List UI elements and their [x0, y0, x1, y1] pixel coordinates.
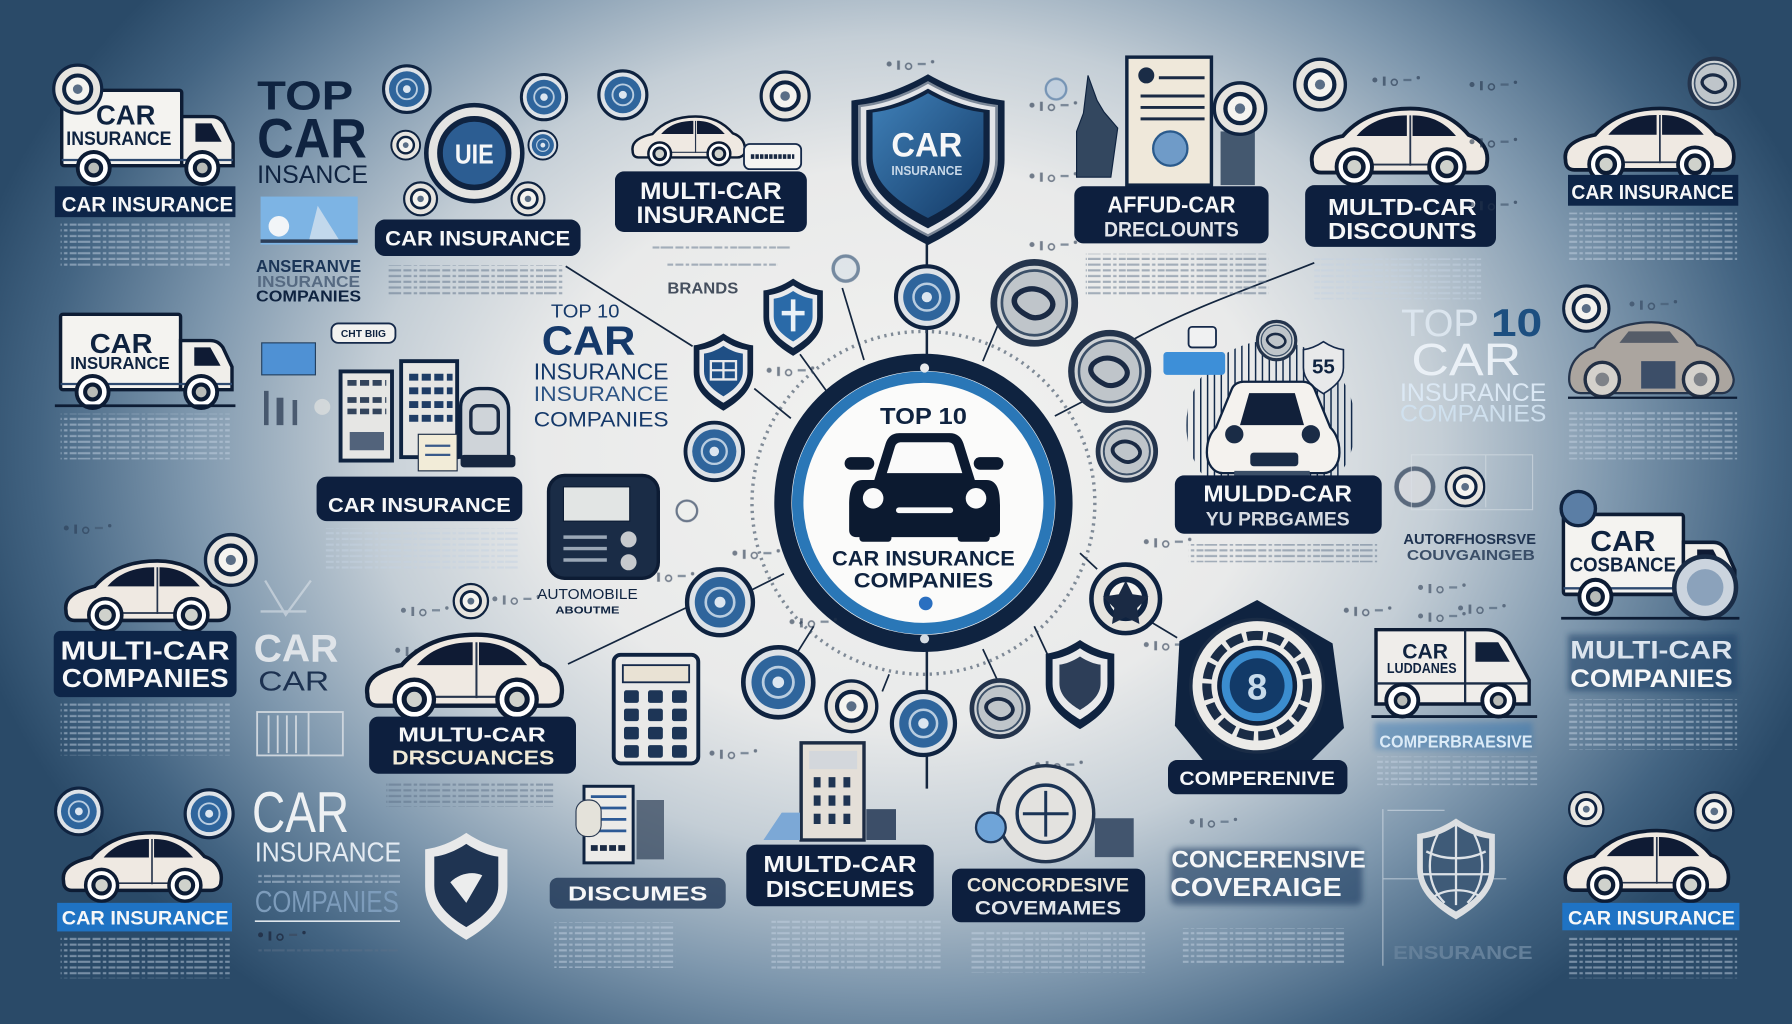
label: MULTD-CAR — [1328, 194, 1477, 220]
icon: sedan — [66, 561, 229, 632]
heading: top car insance — [257, 73, 368, 189]
panel: bottom-right car — [1562, 792, 1739, 978]
label — [1568, 634, 1737, 693]
icon: dark blue badge — [685, 423, 743, 480]
icon: main hub: UIE — [455, 138, 494, 169]
label: MULDD-CAR — [1203, 481, 1353, 507]
heading: top 10 right: 10 — [1491, 302, 1542, 345]
truck text — [1570, 526, 1676, 576]
label — [1305, 185, 1496, 247]
label — [1168, 760, 1347, 794]
small pill — [331, 323, 395, 343]
icon: badge — [1257, 321, 1296, 360]
icon: small marks — [264, 391, 330, 425]
truck text: CAR — [90, 328, 153, 359]
ground line — [1568, 397, 1737, 399]
heading: top 10 left — [534, 301, 669, 431]
heading: top 10 left: COMPANIES — [534, 406, 669, 431]
text block — [971, 931, 1145, 973]
panel: multi-car discumes — [746, 743, 941, 970]
text block — [554, 922, 675, 968]
label — [1175, 475, 1382, 534]
truck text: INSURANCE — [66, 128, 171, 150]
truck text — [66, 100, 171, 150]
label: DRSCUANCES — [392, 747, 554, 770]
small tag — [744, 144, 801, 169]
text block — [651, 245, 791, 298]
heading: top 10 right — [1400, 302, 1546, 428]
icon: blue hub circle — [896, 266, 958, 328]
icon: plant — [1077, 75, 1118, 177]
icon: badge — [454, 584, 488, 618]
icon: badge — [54, 65, 102, 113]
heading: car insurance companies — [832, 546, 1015, 592]
icon: document right — [401, 361, 457, 471]
label — [746, 845, 934, 906]
icon: badge — [1214, 83, 1266, 185]
panel: multi-car discounts — [1295, 59, 1517, 299]
label: MULTI-CAR — [640, 178, 782, 205]
panel: concordesive — [952, 766, 1145, 973]
icon: badges — [599, 71, 809, 120]
icon: top shield — [851, 74, 1005, 245]
text block — [1568, 411, 1737, 459]
van text: CAR — [1402, 638, 1448, 663]
text block — [61, 221, 230, 266]
panel: left multi-car — [54, 524, 256, 755]
icon: badge — [1295, 59, 1345, 110]
label — [1170, 846, 1366, 905]
label: COMPERBRAESIVE — [1379, 731, 1533, 751]
icon: blue-gray cart badge — [743, 647, 813, 717]
icon: blue swirl badge — [687, 569, 753, 635]
text block — [326, 528, 520, 571]
subheading: comprehensive coverage — [1403, 532, 1536, 564]
text block — [1568, 937, 1737, 978]
icon: shield lower right — [1046, 640, 1114, 729]
banner: MULTI-CAR — [61, 635, 230, 665]
icon: car front — [845, 433, 1003, 542]
icon: delivery truck — [61, 314, 232, 408]
truck text: COSBANCE — [1570, 553, 1676, 576]
ground line — [55, 405, 235, 407]
heading: top 10 right: COMPANIES — [1400, 401, 1546, 428]
icon: shield — [1303, 342, 1343, 394]
icon: badges — [1569, 792, 1733, 831]
label — [952, 869, 1145, 922]
small marks — [1418, 583, 1506, 622]
heading: car insurance companies: COMPANIES — [854, 567, 993, 592]
icon: sedan — [63, 833, 221, 901]
subheading: comprehensive coverage: COUVGAINGEB — [1407, 548, 1535, 564]
icon: gray badge lower right — [1098, 423, 1156, 480]
blue dot — [919, 597, 933, 610]
icon: badge — [205, 535, 256, 585]
connector lines — [566, 242, 1314, 789]
icon: building — [763, 743, 896, 840]
icon: sedan — [367, 635, 562, 719]
icon: small badge — [972, 680, 1028, 737]
small marks — [1189, 818, 1237, 827]
icon: star badge — [1091, 565, 1160, 633]
small marks — [1372, 76, 1517, 210]
heading: top 10 left: TOP 10 — [551, 301, 619, 322]
panel: comprehensive seal — [1168, 600, 1347, 794]
text block — [1377, 757, 1537, 785]
icon: scanner — [461, 389, 515, 467]
icon: key sketch — [261, 581, 311, 615]
subtitle block — [256, 873, 400, 883]
heading: top 10 left: CAR — [542, 317, 635, 363]
truck text: CAR — [1590, 526, 1656, 558]
icon: certificate — [1127, 57, 1211, 185]
heading: companies: COMPANIES — [255, 884, 399, 919]
icon: hexagon seal: 8 — [1247, 666, 1267, 707]
heading: top 10 right: CAR — [1411, 334, 1521, 385]
icon: small tag — [1163, 327, 1225, 375]
heading: insurance: INSURANCE — [255, 837, 401, 868]
heading: car: CAR — [254, 628, 338, 671]
icon: sedan — [632, 116, 745, 165]
icon: car — [1569, 322, 1734, 397]
truck text — [70, 328, 170, 373]
frame — [1383, 809, 1506, 966]
banner: CAR INSURANCE — [62, 908, 229, 930]
label: COVERAIGE — [1170, 872, 1342, 902]
heading: top 10 left: INSURANCE — [534, 381, 669, 406]
label: car insurance: CAR INSURANCE — [328, 494, 511, 517]
subheading: insurance companies: INSURANCE — [257, 274, 360, 291]
label — [1074, 186, 1269, 243]
label: COVEMAMES — [975, 897, 1121, 919]
panel: small frame icons — [1403, 455, 1536, 622]
banner — [54, 631, 237, 697]
caption: insurance: ENSURANCE — [1393, 942, 1533, 963]
icon ring around hub — [685, 262, 1160, 755]
icon: badge left — [56, 788, 102, 835]
van text: LUDDANES — [1387, 661, 1457, 677]
heading: top 10 right: TOP — [1401, 302, 1479, 344]
label: INSURANCE — [637, 202, 785, 229]
panel: top-left truck — [54, 65, 235, 266]
heading: top car insance: CAR — [257, 107, 367, 170]
icon: hexagon seal — [1175, 600, 1344, 762]
icon: delivery truck — [62, 90, 233, 184]
heading: car: CAR — [252, 781, 349, 845]
banner: CAR INSURANCE — [1571, 181, 1734, 204]
icon: top shield: INSURANCE — [891, 164, 962, 178]
small pill: CHT BIIG — [341, 329, 386, 340]
heading: top car insance: TOP — [257, 73, 353, 119]
label: COMPANIES — [1570, 665, 1733, 693]
subheading: insurance companies: COMPANIES — [256, 289, 361, 306]
label: CONCORDESIVE — [967, 874, 1129, 896]
icon: main hub — [426, 105, 522, 201]
icon: barcode — [257, 712, 343, 755]
label: DISCOUNTS — [1328, 218, 1477, 244]
icon: badge — [1564, 286, 1609, 331]
icon: gray badge — [994, 262, 1075, 343]
icon: document — [584, 786, 664, 863]
panel: coverage — [1170, 818, 1366, 965]
label: YU PRBGAMES — [1206, 509, 1350, 531]
icon: satellites — [384, 66, 567, 215]
panel: affordable discounts — [1074, 57, 1269, 295]
subheading: comprehensive coverage: AUTORFHOSRSVE — [1403, 532, 1536, 548]
icon: badge — [1446, 468, 1484, 506]
label — [369, 717, 576, 774]
label: MULTI-CAR — [1570, 636, 1733, 664]
text block — [61, 937, 230, 978]
blue card — [262, 343, 315, 375]
label: COMPERENIVE — [1179, 768, 1335, 790]
panel: top-right car — [1565, 59, 1739, 261]
icon: badge — [1561, 491, 1736, 618]
subheading: insurance companies — [256, 256, 361, 306]
label: DISCUMES — [568, 883, 707, 906]
heading: top car insance: INSANCE — [257, 161, 368, 189]
ground line — [1561, 617, 1739, 619]
label: AFFUD-CAR — [1107, 192, 1236, 218]
sunburst — [1186, 341, 1355, 510]
text block — [386, 782, 553, 807]
icon: gray badge right — [1071, 333, 1148, 410]
icon: coin badge — [826, 681, 877, 732]
divider and caption — [255, 921, 400, 953]
panel: car discuances — [367, 584, 576, 807]
label: DISCEUMES — [766, 876, 914, 902]
label: MULTD-CAR — [763, 851, 917, 877]
icon: small marks — [64, 524, 111, 534]
panel: discumes — [550, 786, 726, 968]
icon: sedan — [1565, 108, 1734, 181]
text block — [389, 265, 562, 297]
panel: car column left — [254, 581, 343, 755]
icon: badge — [576, 800, 601, 837]
panel: second left truck — [55, 314, 235, 459]
banner: CAR INSURANCE — [1568, 908, 1735, 930]
image tile — [261, 197, 358, 245]
heading: top 10: TOP 10 — [880, 403, 967, 429]
icon: control device — [549, 475, 658, 578]
icon: seal — [976, 766, 1134, 862]
icon: blue badge bottom — [892, 692, 955, 755]
panel: vintage car — [1564, 286, 1737, 459]
heading: top 10 right: INSURANCE — [1400, 379, 1546, 407]
label: car insurance — [375, 219, 581, 256]
text block — [1086, 254, 1269, 295]
icon: shield upper — [763, 279, 823, 356]
icon: shield left — [694, 333, 753, 411]
heading: car dark: CAR — [258, 665, 329, 696]
label: car insurance: CAR INSURANCE — [385, 226, 570, 251]
panel: bottom-left car — [56, 788, 233, 978]
text block — [1568, 213, 1737, 261]
dashed outer ring — [752, 331, 1095, 674]
panel: van — [1371, 630, 1537, 785]
icon: shield: 55 — [1312, 356, 1335, 379]
small caption: automobile — [537, 587, 638, 617]
label — [615, 171, 807, 232]
small marks — [1629, 300, 1677, 310]
icon: top shield: CAR — [891, 127, 963, 165]
label — [1375, 722, 1533, 751]
label: MULTU-CAR — [398, 724, 546, 747]
frame lines — [1411, 455, 1533, 510]
central emblem — [783, 362, 1064, 643]
label — [550, 878, 726, 909]
label: CONCERENSIVE — [1171, 846, 1366, 873]
heading: top 10 left: INSURANCE — [534, 358, 669, 384]
panel: globe shield — [1383, 809, 1533, 966]
truck text: CAR — [96, 100, 156, 131]
text block: BRANDS — [667, 281, 739, 298]
text block — [1314, 258, 1481, 299]
van text — [1387, 638, 1457, 677]
icon: sedan — [1312, 109, 1487, 185]
small marks — [395, 595, 540, 656]
text block — [1183, 928, 1345, 965]
text block — [61, 414, 230, 459]
icon: car front — [1207, 382, 1339, 478]
subheading: insurance companies: ANSERANVE — [256, 256, 361, 276]
icon: document left — [341, 371, 392, 461]
icon: badge — [1690, 59, 1739, 108]
text block — [1568, 699, 1737, 750]
icon: van — [1371, 630, 1537, 717]
panel: top hub cluster — [375, 66, 581, 297]
panel: front car — [1163, 321, 1382, 562]
icon: badge right — [185, 790, 233, 838]
text block — [61, 703, 230, 755]
icon: shield — [1417, 819, 1495, 920]
scattered micro icons — [647, 60, 1460, 770]
label: car insurance — [317, 477, 522, 521]
truck text: INSURANCE — [70, 353, 170, 373]
heading: car insurance companies: CAR INSURANCE — [832, 546, 1015, 571]
banner: CAR INSURANCE — [62, 191, 233, 216]
panel: top multi-car insurance — [599, 71, 809, 298]
panel: right truck — [1561, 491, 1739, 750]
text block — [771, 920, 941, 970]
icon: truck — [1563, 514, 1735, 614]
panel: bottom car heading — [252, 781, 401, 953]
text block — [1189, 544, 1377, 562]
icon: sedan — [1565, 831, 1728, 901]
small caption: automobile: ABOUTME — [555, 606, 620, 617]
icon: calculator — [614, 655, 698, 763]
banner: COMPANIES — [62, 663, 229, 693]
small caption: automobile: AUTOMOBILE — [537, 587, 638, 603]
icon: bottom shield — [425, 833, 507, 940]
label: DRECLOUNTS — [1104, 217, 1239, 242]
panel: documents cluster — [262, 323, 522, 571]
